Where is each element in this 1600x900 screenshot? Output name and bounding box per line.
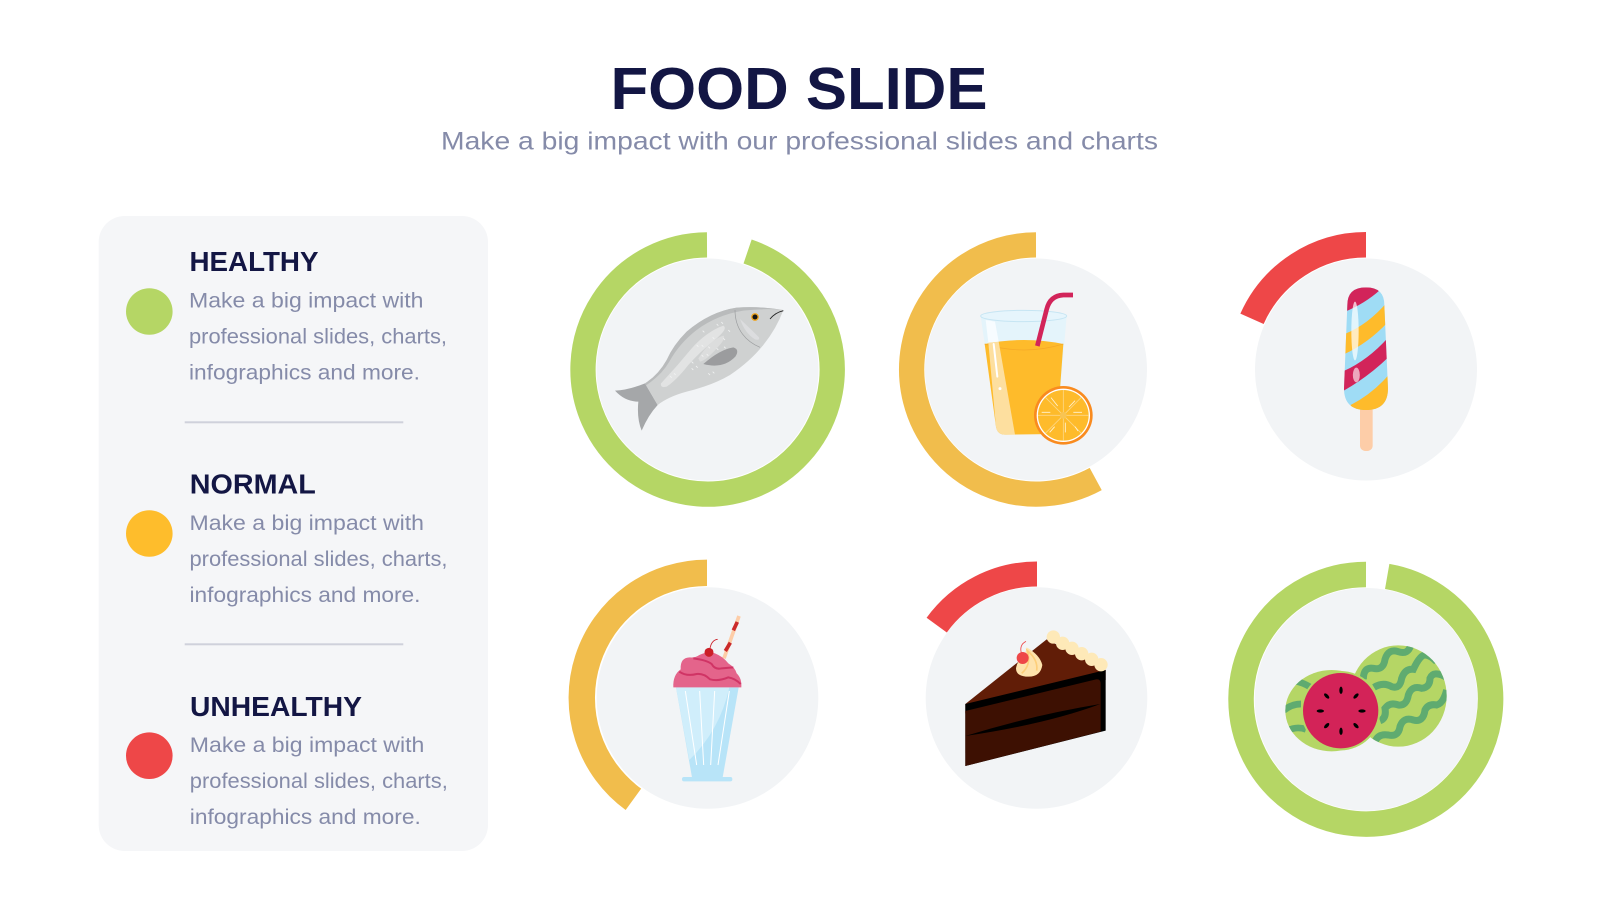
icon: fish xyxy=(615,307,783,431)
food gauge: milkshake xyxy=(582,573,818,809)
legend: normal xyxy=(126,468,448,607)
food gauge: popsicle xyxy=(1252,245,1477,480)
food gauge: watermelon xyxy=(1241,575,1491,824)
icon: cake slice xyxy=(965,630,1108,766)
food gauge: juice xyxy=(912,245,1147,494)
food gauge: chocolate cake xyxy=(926,574,1147,809)
legend: healthy: Make a big impact with xyxy=(189,290,424,312)
title: FOOD SLIDE xyxy=(610,56,988,122)
legend: healthy: HEALTHY xyxy=(190,246,319,277)
icon: orange juice xyxy=(981,295,1093,445)
legend: unhealthy: Make a big impact with xyxy=(190,734,424,757)
legend: unhealthy: professional slides, charts, xyxy=(190,770,448,793)
legend: normal: NORMAL xyxy=(190,468,316,500)
legend: normal: infographics and more. xyxy=(190,584,420,607)
legend: healthy: infographics and more. xyxy=(189,362,420,384)
legend: healthy xyxy=(126,246,447,384)
food gauge: fish xyxy=(583,245,832,494)
icon: popsicle xyxy=(1344,287,1388,451)
legend: healthy: professional slides, charts, xyxy=(189,326,447,348)
panel: legend xyxy=(99,216,488,851)
icon: milkshake xyxy=(673,616,741,781)
legend: unhealthy: infographics and more. xyxy=(190,806,421,829)
legend: normal: Make a big impact with xyxy=(190,512,424,535)
legend: unhealthy xyxy=(126,691,448,829)
legend: normal: professional slides, charts, xyxy=(190,548,448,571)
subtitle: Make a big impact with our professional slides and charts xyxy=(441,128,1158,156)
legend: unhealthy: UNHEALTHY xyxy=(190,691,362,722)
icon: watermelon xyxy=(1283,645,1447,751)
